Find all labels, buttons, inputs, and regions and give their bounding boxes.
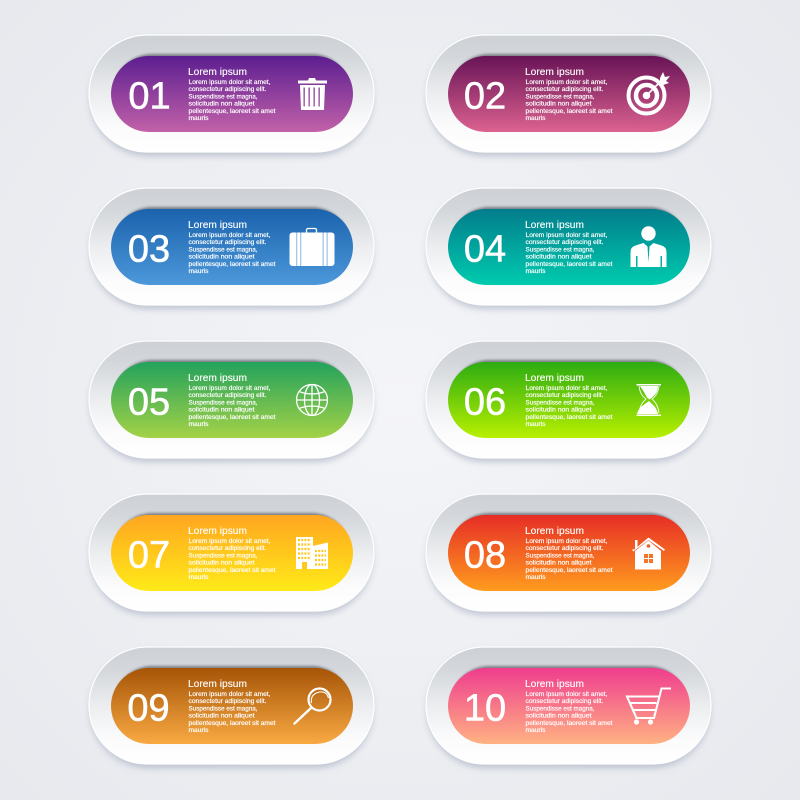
card 02: target: Suspendisse est magna,	[526, 93, 595, 100]
card 05: globe: Suspendisse est magna,	[188, 399, 258, 406]
card 06: hourglass: consectetur adipiscing elit.	[526, 392, 604, 399]
card 04: businessman: pellentesque, laoreet sit amet	[526, 261, 613, 268]
card 02: target: 02	[464, 76, 506, 118]
card 02: target	[426, 35, 711, 156]
card 07: buildings: solicitudin non aliquet	[188, 560, 255, 567]
card 01: trash: Lorem ipsum dolor sit amet,	[188, 79, 271, 86]
card 04: businessman: Lorem ipsum	[525, 220, 584, 231]
icon: shopping cart	[627, 688, 671, 725]
card 03: briefcase: 03	[128, 228, 170, 270]
card 03: briefcase: Lorem ipsum	[188, 220, 247, 231]
card 05: globe	[89, 341, 374, 462]
card 10: cart: pellentesque, laoreet sit amet	[526, 720, 613, 727]
card 07: buildings: 07	[128, 534, 170, 576]
card 04: businessman: Lorem ipsum dolor sit amet,	[526, 232, 608, 239]
card 10: cart: Lorem ipsum dolor sit amet,	[526, 691, 608, 698]
card 04: businessman: consectetur adipiscing elit.	[526, 239, 604, 246]
card 02: target: consectetur adipiscing elit.	[526, 86, 604, 93]
card 03: briefcase: consectetur adipiscing elit.	[188, 239, 267, 246]
card 04: businessman: 04	[464, 228, 506, 270]
card 01: trash: Lorem ipsum	[188, 67, 247, 78]
card 09: magnifier: pellentesque, laoreet sit amet	[188, 720, 276, 727]
card 10: cart: mauris	[526, 727, 546, 734]
card 01: trash	[89, 35, 374, 156]
card 01: trash: solicitudin non aliquet	[188, 101, 255, 108]
card 04: businessman	[426, 188, 711, 309]
card 09: magnifier: Lorem ipsum dolor sit amet,	[188, 691, 271, 698]
card 03: briefcase: Lorem ipsum dolor sit amet,	[188, 232, 271, 239]
card 05: globe: consectetur adipiscing elit.	[188, 392, 267, 399]
card 02: target: mauris	[526, 115, 546, 122]
icon: magnifying glass	[294, 688, 330, 724]
icon: trash can	[298, 78, 327, 110]
card 07: buildings: Lorem ipsum	[188, 526, 247, 537]
card 09: magnifier: consectetur adipiscing elit.	[188, 698, 267, 705]
card 05: globe: pellentesque, laoreet sit amet	[188, 414, 276, 421]
card 05: globe: 05	[128, 382, 170, 424]
card 02: target: solicitudin non aliquet	[526, 101, 592, 108]
icon: office buildings	[296, 537, 328, 569]
card 01: trash: consectetur adipiscing elit.	[188, 86, 267, 93]
icon: businessman	[630, 226, 666, 267]
card 07: buildings: consectetur adipiscing elit.	[188, 545, 267, 552]
card 05: globe: solicitudin non aliquet	[188, 407, 255, 414]
card 07: buildings: Lorem ipsum dolor sit amet,	[188, 538, 271, 545]
card 01: trash: mauris	[188, 115, 209, 122]
card 02: target: Lorem ipsum	[525, 67, 584, 78]
card 06: hourglass: solicitudin non aliquet	[526, 407, 592, 414]
card 03: briefcase: Suspendisse est magna,	[188, 246, 258, 253]
card 01: trash: pellentesque, laoreet sit amet	[188, 108, 276, 115]
card 09: magnifier: Suspendisse est magna,	[188, 705, 258, 712]
card 09: magnifier: Lorem ipsum	[188, 679, 247, 690]
card 05: globe: mauris	[188, 421, 209, 428]
card 06: hourglass: mauris	[526, 421, 546, 428]
card 10: cart: 10	[464, 688, 506, 730]
card 03: briefcase: solicitudin non aliquet	[188, 254, 255, 261]
card 06: hourglass: Suspendisse est magna,	[526, 399, 595, 406]
card 07: buildings	[89, 494, 374, 615]
card 08: house: mauris	[526, 574, 546, 581]
icon: globe	[296, 384, 328, 416]
card 08: house: consectetur adipiscing elit.	[526, 545, 604, 552]
card 08: house	[426, 494, 711, 615]
card 03: briefcase: mauris	[188, 268, 209, 275]
card 08: house: Lorem ipsum	[525, 526, 584, 537]
card 06: hourglass: 06	[464, 382, 506, 424]
card 10: cart: Suspendisse est magna,	[526, 705, 595, 712]
card 08: house: 08	[464, 534, 506, 576]
card 09: magnifier: mauris	[188, 727, 209, 734]
card 09: magnifier: 09	[127, 688, 170, 730]
card 08: house: Lorem ipsum dolor sit amet,	[526, 538, 608, 545]
card 09: magnifier	[89, 647, 374, 768]
card 04: businessman: solicitudin non aliquet	[526, 254, 592, 261]
card 01: trash: 01	[128, 76, 171, 118]
card 10: cart: solicitudin non aliquet	[526, 713, 592, 720]
card 08: house: pellentesque, laoreet sit amet	[526, 567, 613, 574]
card 09: magnifier: solicitudin non aliquet	[188, 713, 255, 720]
card 02: target: Lorem ipsum dolor sit amet,	[526, 79, 608, 86]
card 05: globe: Lorem ipsum	[188, 373, 247, 384]
icon: briefcase	[290, 228, 334, 266]
card 04: businessman: mauris	[526, 268, 546, 275]
card 05: globe: Lorem ipsum dolor sit amet,	[188, 385, 271, 392]
card 07: buildings: pellentesque, laoreet sit amet	[188, 567, 276, 574]
icon: house	[632, 538, 665, 570]
card 10: cart: consectetur adipiscing elit.	[526, 698, 604, 705]
card 01: trash: Suspendisse est magna,	[188, 93, 258, 100]
card 06: hourglass: pellentesque, laoreet sit amet	[526, 414, 613, 421]
card 02: target: pellentesque, laoreet sit amet	[526, 108, 613, 115]
card 07: buildings: Suspendisse est magna,	[188, 552, 258, 559]
card 10: cart	[426, 647, 711, 768]
card 06: hourglass: Lorem ipsum dolor sit amet,	[526, 385, 608, 392]
icon: target with arrow	[628, 72, 670, 114]
card 04: businessman: Suspendisse est magna,	[526, 246, 595, 253]
card 06: hourglass: Lorem ipsum	[525, 373, 584, 384]
card 03: briefcase	[89, 188, 374, 309]
card 03: briefcase: pellentesque, laoreet sit amet	[188, 261, 276, 268]
card 10: cart: Lorem ipsum	[525, 679, 584, 690]
icon: hourglass	[636, 384, 661, 416]
card 06: hourglass	[426, 341, 711, 462]
card 07: buildings: mauris	[188, 574, 209, 581]
card 08: house: Suspendisse est magna,	[526, 552, 595, 559]
card 08: house: solicitudin non aliquet	[526, 560, 592, 567]
